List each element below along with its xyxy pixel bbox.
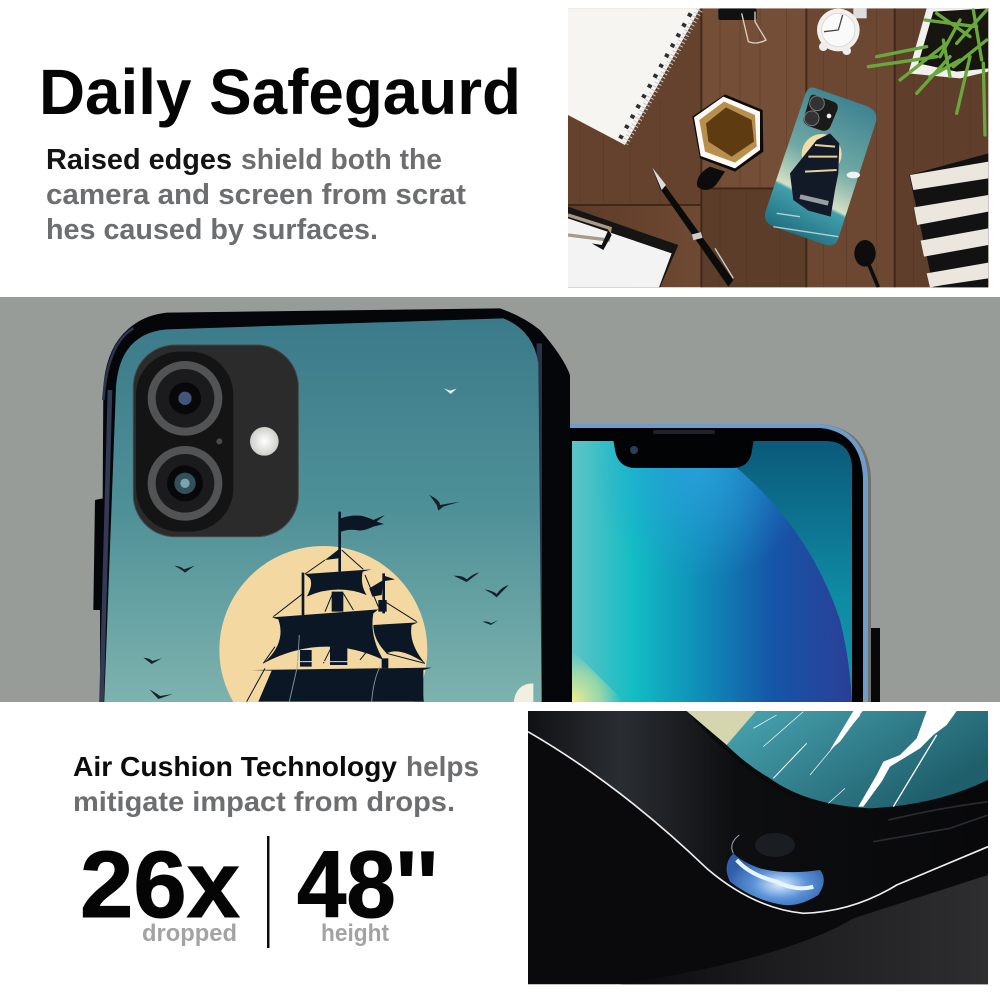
- panel: air cushion close-up photo: [528, 711, 988, 984]
- cloud: [514, 683, 534, 702]
- coffee cup: [692, 94, 763, 190]
- notch: [614, 441, 754, 468]
- screen artwork: sky: [104, 318, 542, 708]
- text block: air cushion technology: [73, 751, 479, 817]
- clipboard: [568, 207, 678, 287]
- pen: [652, 168, 733, 287]
- ship silhouette: [247, 512, 432, 702]
- text block: air cushion technology: helps: [406, 751, 479, 782]
- camera module: [133, 345, 298, 537]
- text block: raised edges: shield both the: [241, 144, 442, 176]
- binder clip: [718, 8, 766, 43]
- stat: 48 inches height: height: [321, 920, 389, 947]
- striped notebook: [909, 153, 988, 287]
- alarm clock: [817, 8, 867, 55]
- spoon: [854, 240, 878, 287]
- lens bottom: [148, 446, 222, 521]
- wallpaper: [572, 441, 852, 702]
- plant: [868, 8, 988, 135]
- text block: raised edges: hes caused by surfaces.: [46, 214, 378, 246]
- moon: [219, 546, 428, 702]
- lens top: [148, 361, 222, 436]
- notebook: [568, 8, 700, 145]
- text block: air cushion technology: Air Cushion Technology: [73, 751, 397, 782]
- text block: air cushion technology: mitigate impact from drops.: [73, 786, 455, 817]
- title: Daily Safegaurd: [39, 56, 521, 128]
- back phone case: [93, 308, 570, 702]
- text block: raised edges: Raised edges: [46, 144, 232, 176]
- panel: lifestyle photo on wooden desk: [568, 8, 988, 287]
- screen window: [687, 711, 988, 808]
- text block: raised edges: camera and screen from scrat: [46, 179, 466, 211]
- seagulls: [143, 388, 509, 699]
- side button: [871, 628, 880, 702]
- flash: [250, 427, 279, 456]
- stat: 26x dropped: 26x: [80, 832, 240, 938]
- panel: grey band with phones: [0, 297, 1000, 702]
- front phone: [560, 424, 880, 702]
- white edge line: [528, 732, 988, 913]
- case band: [528, 711, 721, 878]
- stat: 48 inches height: 48'': [297, 832, 438, 938]
- table surface: [620, 875, 988, 984]
- mini phone case: [765, 87, 876, 245]
- stat: 26x dropped: dropped: [142, 920, 237, 947]
- air cushion droplet: [727, 833, 824, 905]
- text block: raised edges: [46, 144, 466, 246]
